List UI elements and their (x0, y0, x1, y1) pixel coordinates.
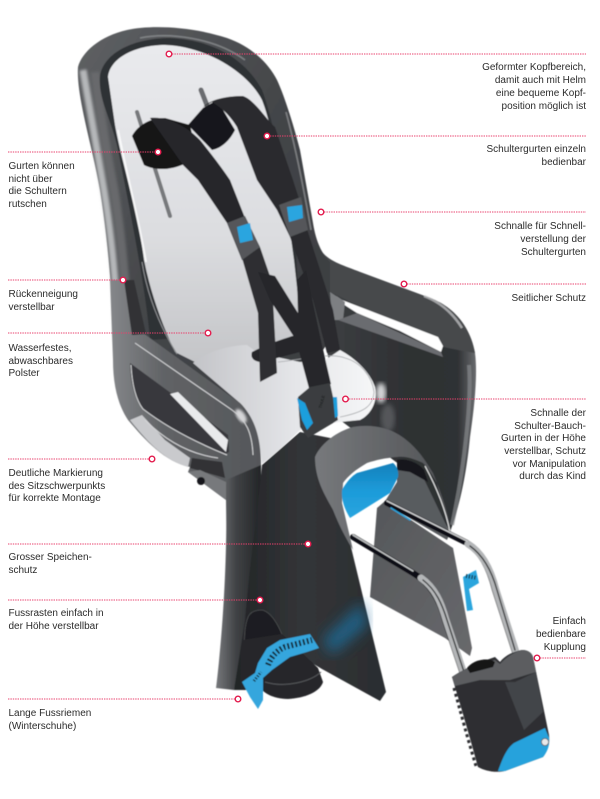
rear blue strap tab (463, 570, 479, 611)
callout: Markierung: des Sitzschwerpunkts (8, 481, 105, 492)
callout: Schnelle Verstellung: verstellung der (520, 234, 587, 245)
callout: Fussrasten: Fussrasten einfach in (8, 608, 104, 619)
callout: Geformter Kopfbereich: damit auch mit Helm (495, 75, 586, 86)
callout: Fussrasten (8, 597, 263, 632)
callout: Schnelle Verstellung: Schultergurten (521, 247, 586, 258)
child bike seat product illustration (78, 27, 549, 772)
seat cushion (193, 345, 376, 464)
callout: Fussriemen: (Winterschuhe) (8, 721, 76, 732)
callout: Kupplung: Kupplung (544, 642, 586, 653)
callout: Schultergurten: Schultergurten einzeln (486, 144, 586, 155)
back straps and pads (132, 96, 340, 438)
callout: Schultergurten (264, 133, 587, 168)
callout: Markierung: für korrekte Montage (8, 493, 101, 504)
callout: Schnalle Schulter-Bauch-Gurten (343, 396, 587, 482)
callout: Fussriemen (8, 696, 241, 732)
callout: Schnalle Schulter-Bauch-Gurten: vor Manipulation (513, 459, 586, 470)
callout: Schnelle Verstellung (318, 209, 587, 258)
callout: Gurten: nicht über (8, 174, 53, 185)
right shoulder strap (203, 96, 340, 353)
callout: Geformter Kopfbereich: eine bequeme Kopf- (496, 88, 586, 99)
central buckle: THULE (318, 394, 326, 409)
callout: Polster: Wasserfestes, (8, 343, 71, 354)
callout: Gurten: rutschen (8, 199, 47, 210)
callout: Geformter Kopfbereich (166, 51, 586, 112)
callout: Speichenschutz: schutz (8, 565, 37, 576)
main back shell (78, 27, 330, 440)
callout: Schnalle Schulter-Bauch-Gurten: Schnalle der (530, 408, 587, 419)
blue pad (342, 463, 398, 518)
armrest highlight (233, 407, 249, 425)
callout: Speichenschutz: Grosser Speichen- (8, 552, 92, 563)
callout: Geformter Kopfbereich: position möglich ist (502, 101, 586, 112)
callout: Rückenneigung (8, 277, 126, 313)
front guard (315, 426, 451, 550)
callout: Geformter Kopfbereich: Geformter Kopfbereich, (482, 62, 586, 73)
callout: Kupplung: bedienbare (536, 629, 586, 640)
diagonal strap (258, 270, 331, 392)
back cushion (108, 45, 310, 362)
central keel (234, 432, 386, 701)
blue corner (498, 728, 549, 771)
callout: Schnalle Schulter-Bauch-Gurten: durch das Kind (519, 471, 586, 482)
right armrest top band (322, 252, 475, 353)
callout: Gurten (8, 149, 161, 210)
callout: Schnelle Verstellung: Schnalle für Schnell- (494, 221, 586, 232)
callout: Fussriemen: Lange Fussriemen (8, 708, 91, 719)
blue foot strap (242, 634, 319, 709)
callout: Markierung (8, 456, 155, 504)
callout: Fussrasten: der Höhe verstellbar (8, 621, 99, 632)
left strap buckle (227, 216, 260, 260)
callout: Rückenneigung: Rückenneigung (8, 289, 78, 300)
callout: Kupplung (534, 616, 586, 661)
footrest back plate (244, 610, 284, 645)
callout: Gurten: Gurten können (8, 161, 75, 172)
bike mount rear plate (370, 502, 472, 656)
footrest (243, 634, 323, 699)
quick release coupling (452, 650, 549, 772)
highlight on shell (376, 383, 386, 403)
right side shell and armrest (322, 252, 476, 532)
chrome tubes (353, 501, 516, 680)
blue glow on keel (322, 602, 368, 655)
callout: Rückenneigung: verstellbar (8, 302, 55, 313)
callout: Schnalle Schulter-Bauch-Gurten: Gurten in der Höhe (501, 433, 586, 444)
callout: Schnalle Schulter-Bauch-Gurten: Schulter-Bauch- (514, 421, 586, 432)
serrated grip (454, 688, 476, 766)
callout: Markierung: Deutliche Markierung (8, 468, 103, 479)
central buckle (297, 383, 338, 438)
rear shoulder pad (188, 100, 235, 150)
left side strip (216, 465, 261, 690)
callout: Polster: Polster (8, 368, 40, 379)
callout: Seitlicher Schutz (401, 281, 586, 304)
callout: Seitlicher Schutz: Seitlicher Schutz (512, 293, 586, 304)
right strap buckle (279, 197, 308, 237)
left shoulder pad (132, 118, 198, 169)
right armrest opening (336, 296, 443, 352)
lower slot shadow (251, 335, 300, 362)
callout: Schnalle Schulter-Bauch-Gurten: verstellbar, Schutz (504, 446, 586, 457)
left shoulder strap (150, 118, 260, 260)
callout: Polster: abwaschbares (8, 356, 73, 367)
lower vertical strap (242, 247, 277, 382)
guard inner (384, 467, 450, 540)
key lock (541, 738, 549, 746)
callout: Kupplung: Einfach (553, 616, 586, 627)
rim highlight (140, 36, 245, 60)
armrest opening (130, 363, 229, 454)
inner dark rim (100, 38, 300, 340)
underside bracket (190, 458, 225, 478)
left armrest (110, 280, 262, 560)
armrest ridge line (135, 343, 253, 455)
armrest light patch (130, 415, 190, 467)
callout: Schultergurten: bedienbar (542, 157, 587, 168)
callout: Polster (8, 330, 211, 379)
callout: Gurten: die Schultern (8, 186, 67, 197)
strap adjustment slots (137, 112, 170, 216)
callout: Speichenschutz (8, 541, 311, 576)
left rim shading (83, 70, 128, 335)
